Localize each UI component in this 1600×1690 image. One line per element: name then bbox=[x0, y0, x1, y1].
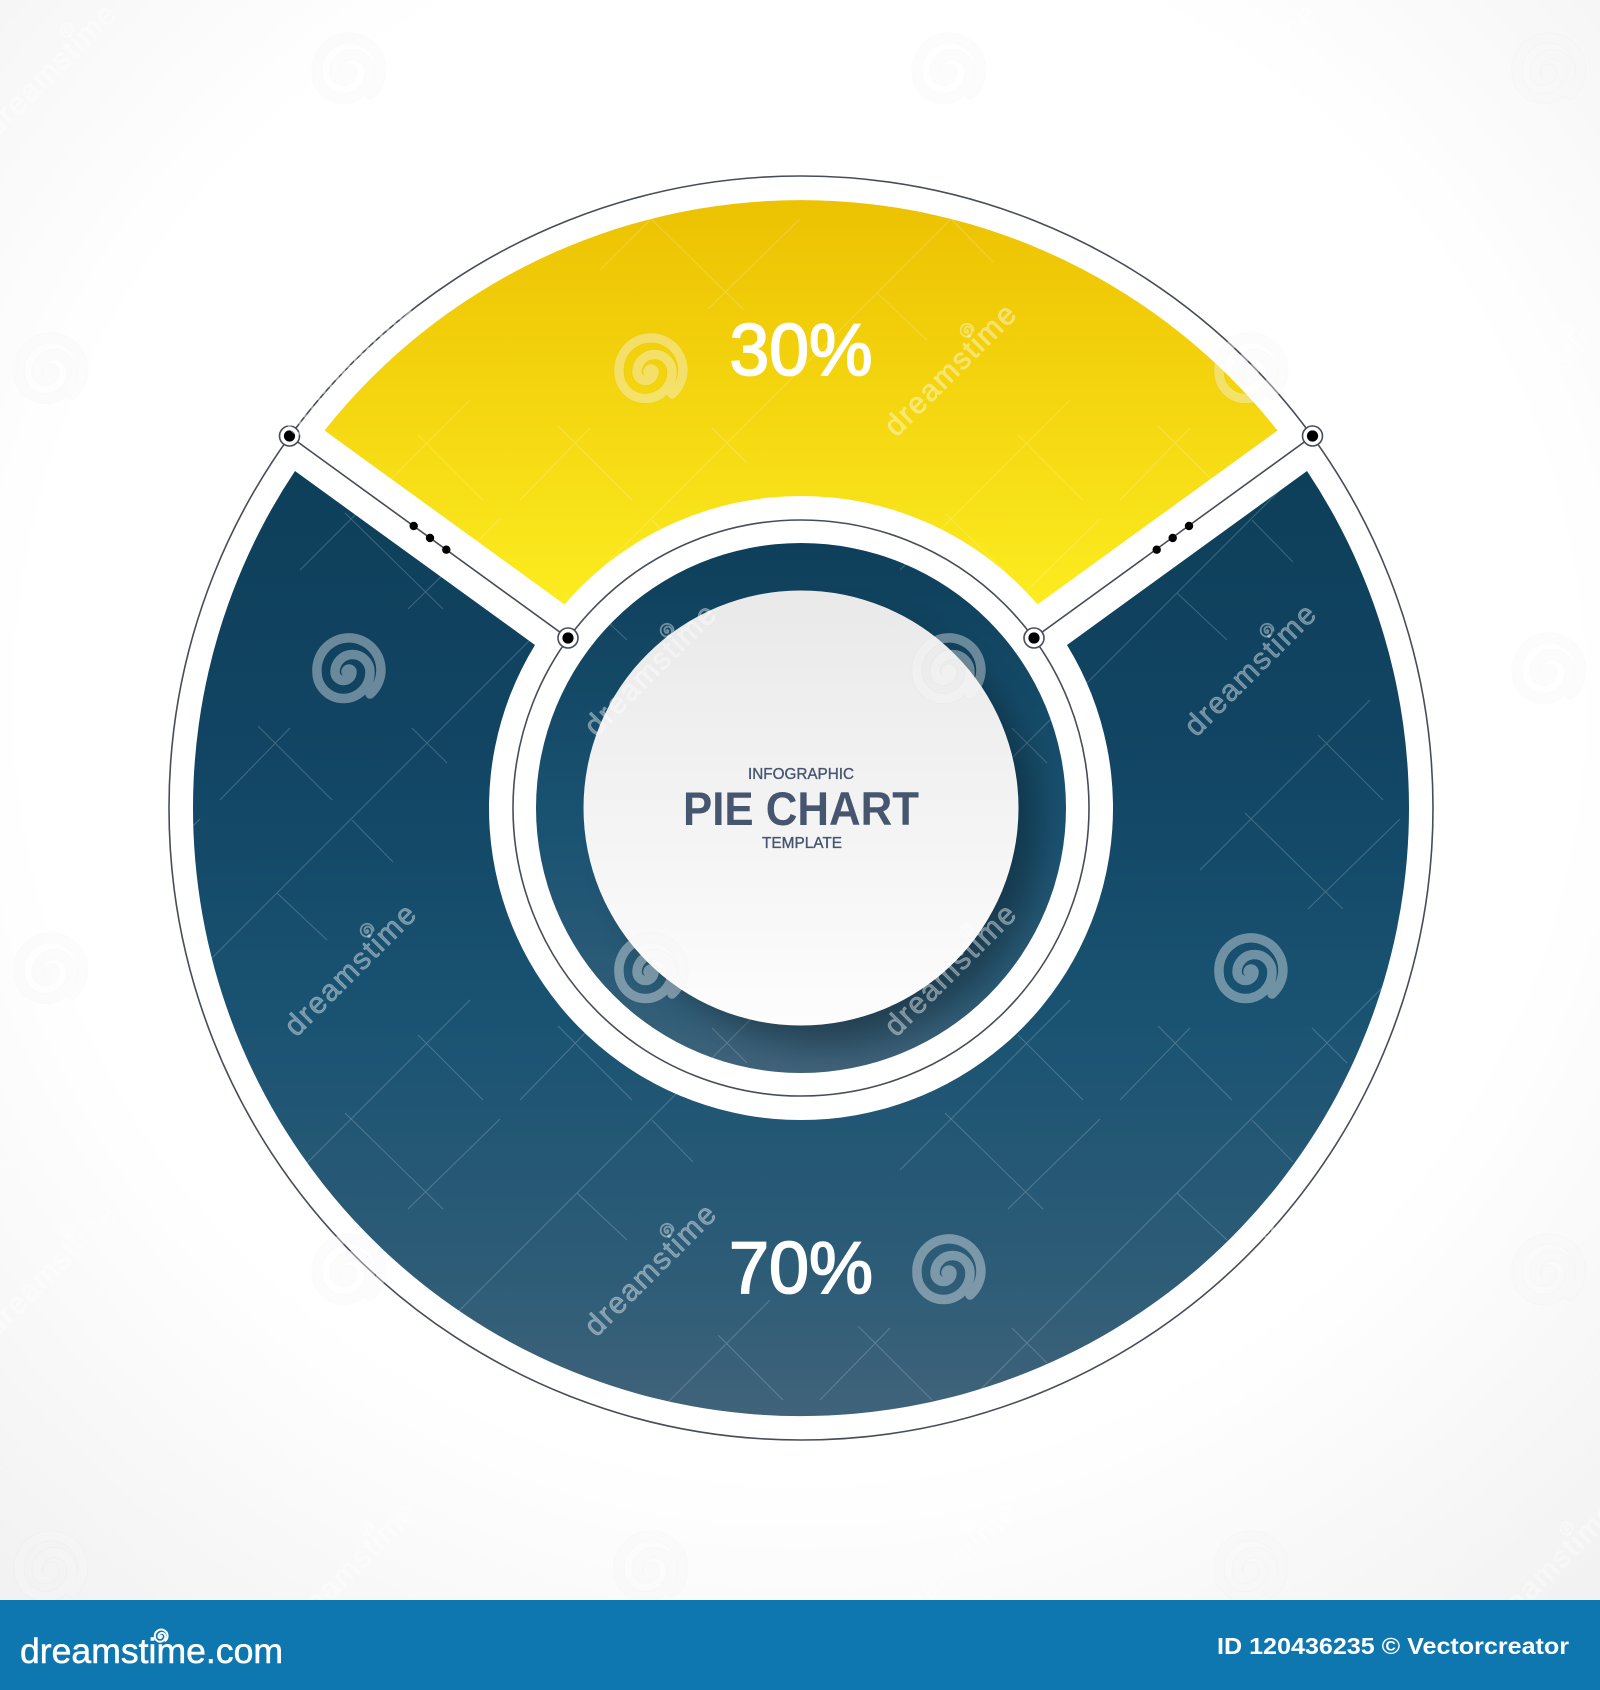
value: 30%: 30% bbox=[730, 310, 872, 391]
three dots: left divider bbox=[410, 522, 450, 554]
logo text: dreamstime.com bbox=[20, 1632, 283, 1671]
watermark text: dreamstime bbox=[278, 298, 423, 443]
footer bar bbox=[0, 1600, 1600, 1690]
watermark text: dreamstime bbox=[878, 898, 1023, 1043]
watermark text: dreamstime bbox=[878, 1496, 1023, 1641]
inner ring line bbox=[513, 520, 1089, 1096]
divider line: left bbox=[290, 436, 568, 638]
watermark text: dreamstime bbox=[1178, 1198, 1323, 1343]
watermark text: dreamstime bbox=[1178, 598, 1323, 743]
center title bbox=[683, 766, 919, 852]
three dots: right divider bbox=[1152, 522, 1193, 554]
watermark text: dreamstime bbox=[578, 598, 723, 743]
watermark text: dreamstime bbox=[578, 0, 723, 143]
watermark text: dreamstime bbox=[278, 1496, 423, 1641]
segment: 70% navy bbox=[193, 471, 1409, 1416]
node: outer right bbox=[1302, 426, 1322, 446]
watermark text: dreamstime bbox=[278, 898, 423, 1043]
center disc bbox=[584, 590, 1018, 1026]
segment: 30% yellow bbox=[324, 200, 1278, 604]
logo spiral bbox=[155, 1630, 168, 1642]
inner navy disc bbox=[536, 543, 1066, 1073]
label: infographic: INFOGRAPHIC bbox=[748, 766, 854, 783]
node: outer left bbox=[280, 426, 300, 446]
value: 70%: 70% bbox=[729, 1228, 873, 1309]
watermark text: dreamstime bbox=[578, 1198, 723, 1343]
center disc shadow bbox=[616, 620, 1040, 1044]
label: template: TEMPLATE bbox=[762, 835, 842, 852]
watermark text: dreamstime bbox=[1178, 0, 1323, 143]
node: inner left bbox=[558, 628, 578, 648]
divider line: right bbox=[1034, 436, 1312, 638]
label: pie chart: PIE CHART bbox=[683, 783, 919, 836]
image id and credit: ID 120436235 © Vectorcreator bbox=[1217, 1633, 1569, 1659]
pie chart bbox=[168, 175, 1434, 1441]
node: inner right bbox=[1024, 628, 1044, 648]
watermark text: dreamstime bbox=[878, 298, 1023, 443]
outer ring line bbox=[169, 176, 1433, 1440]
